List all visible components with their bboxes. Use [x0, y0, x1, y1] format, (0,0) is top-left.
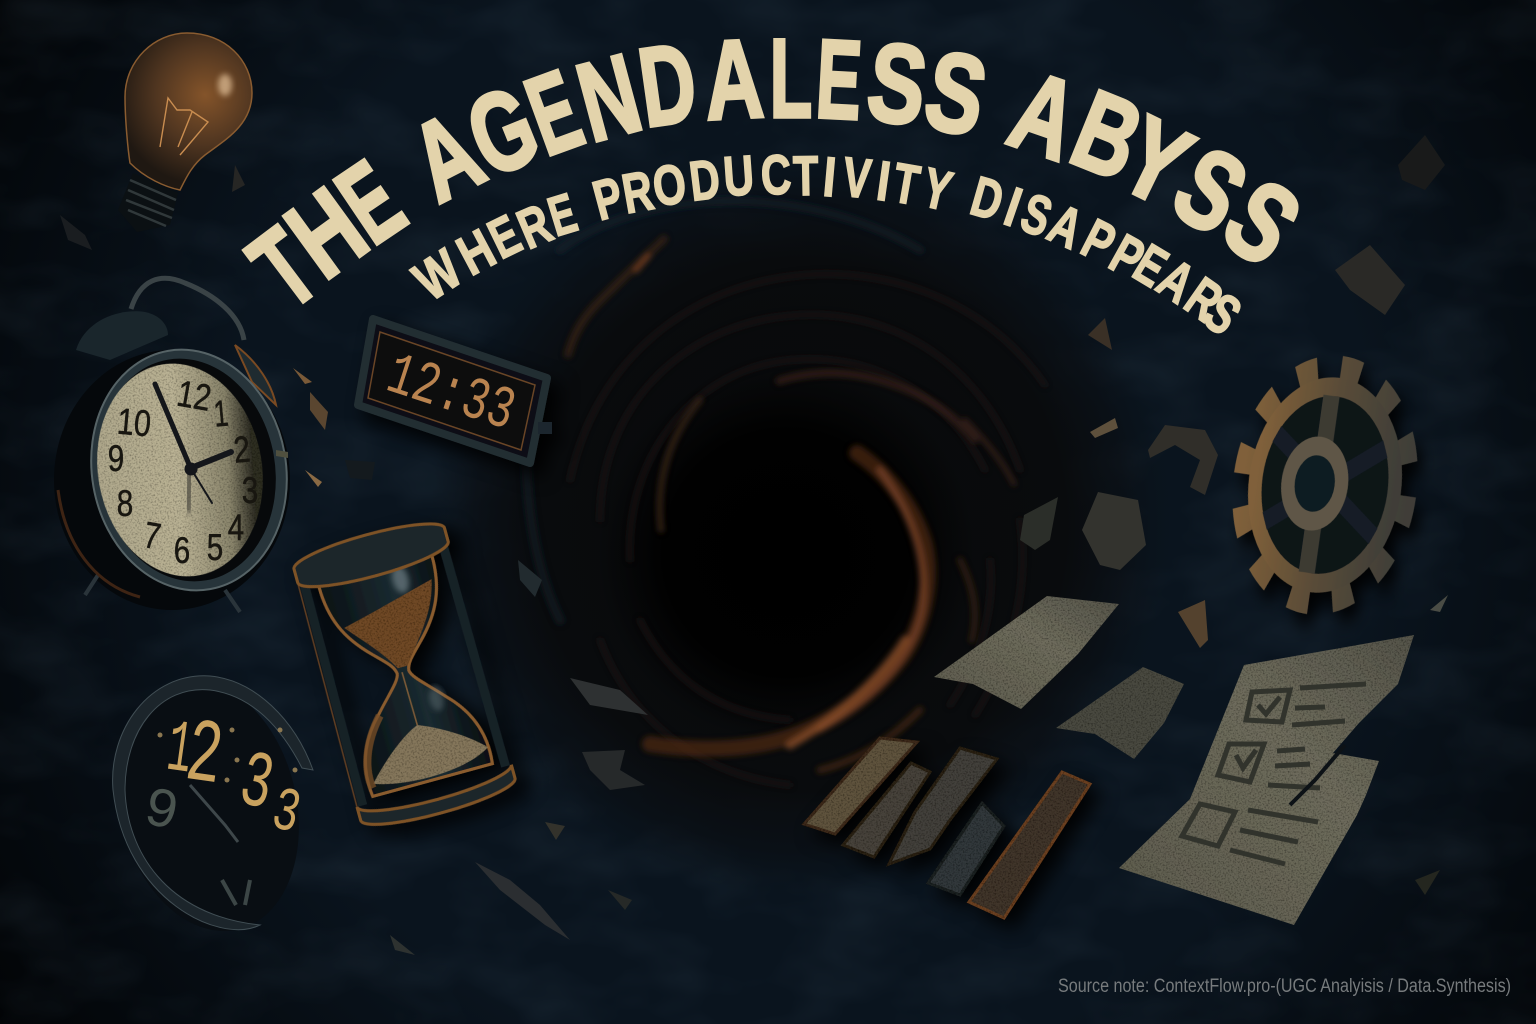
subtitle: I — [997, 175, 1029, 239]
title: E — [316, 137, 425, 267]
icon: digital clock — [358, 319, 552, 463]
title: S — [915, 27, 997, 161]
title: G — [451, 62, 554, 201]
gear teeth — [1227, 357, 1423, 613]
subtitle: E — [1123, 233, 1178, 300]
icon: broken clock — [92, 660, 324, 950]
subtitle: H — [447, 217, 505, 287]
title: S — [860, 19, 934, 150]
title: Y — [1102, 93, 1209, 231]
flying debris — [60, 135, 1448, 955]
digital time: 12:33 — [378, 342, 523, 447]
title: S — [1201, 156, 1322, 290]
upper sand — [338, 579, 452, 679]
icon: light bulb — [118, 33, 252, 232]
clock numbers: 7 — [140, 515, 164, 558]
clock numbers: 8 — [117, 484, 133, 525]
subtitle: O — [649, 152, 690, 219]
clock numbers: 5 — [207, 528, 223, 569]
plank two — [843, 763, 930, 857]
gear spokes — [1307, 396, 1332, 573]
check lines — [1230, 684, 1366, 864]
subtitle: U — [721, 144, 756, 208]
fragmented digits: 3 — [232, 738, 281, 833]
fragmented digits: 9 — [138, 777, 184, 846]
subtitle: S — [1013, 182, 1060, 249]
subtitle: Y — [917, 156, 958, 223]
fragmented digits — [138, 704, 307, 851]
title: S — [1153, 123, 1267, 259]
subtitle: A — [1147, 247, 1206, 316]
subtitle — [403, 143, 1252, 347]
icon: alarm clock — [54, 278, 306, 612]
clock numbers: 2 — [232, 429, 252, 472]
clock numbers: 3 — [242, 471, 258, 512]
subtitle: V — [840, 146, 874, 211]
subtitle: R — [1174, 266, 1233, 334]
title: A — [392, 88, 501, 226]
clock numbers — [108, 373, 258, 572]
title: H — [265, 165, 388, 302]
clock numbers: 12 — [174, 373, 214, 420]
check boxes — [1182, 690, 1290, 846]
lower sand — [362, 709, 491, 792]
clock hands — [155, 384, 231, 510]
rust arms — [526, 201, 1014, 770]
title: B — [1056, 66, 1159, 204]
subtitle: P — [1072, 207, 1125, 275]
title: A — [702, 16, 766, 144]
clock numbers: 1 — [212, 392, 230, 435]
icon: hourglass — [288, 514, 519, 834]
subtitle: P — [1100, 223, 1154, 291]
subtitle: A — [1039, 192, 1092, 262]
title: L — [770, 16, 812, 141]
subtitle: E — [479, 204, 531, 271]
bulb glass — [125, 33, 252, 190]
plank one — [804, 738, 917, 834]
title: T — [229, 205, 340, 332]
subtitle: T — [792, 145, 819, 208]
clock numbers: 6 — [174, 531, 190, 572]
fragmented digits: 3 — [265, 776, 307, 851]
paper fragment one — [934, 596, 1119, 709]
subtitle: C — [759, 143, 793, 207]
caps — [288, 514, 519, 834]
subtitle: P — [587, 165, 630, 233]
bulb screw base — [118, 173, 178, 232]
clock numbers: 4 — [228, 508, 244, 549]
subtitle: D — [964, 165, 1010, 233]
clock numbers: 10 — [115, 401, 153, 445]
icon: gear — [1227, 357, 1423, 613]
subtitle: I — [821, 145, 839, 209]
gear hub — [1283, 442, 1346, 525]
subtitle: I — [873, 149, 894, 213]
bulb filament — [160, 98, 208, 155]
broken planks — [804, 738, 1090, 918]
broken clock body — [92, 660, 324, 950]
fragmented digits: 1 — [162, 707, 198, 794]
title: A — [996, 47, 1093, 184]
subtitle: D — [686, 148, 723, 213]
clock bezel — [72, 334, 306, 606]
title: N — [566, 30, 653, 166]
fragmented digits: 2 — [180, 704, 229, 809]
title: E — [511, 46, 596, 179]
subtitle: R — [618, 159, 658, 226]
clock bells and handle — [54, 278, 290, 612]
clock numbers: 9 — [108, 439, 124, 480]
plank three — [889, 748, 997, 864]
subtitle: W — [403, 237, 472, 313]
frame rods — [300, 539, 506, 805]
subtitle: S — [1193, 282, 1252, 347]
clock face — [81, 350, 279, 590]
title: D — [632, 20, 704, 151]
plank five — [969, 772, 1090, 918]
gear ring — [1242, 378, 1408, 592]
subtitle: E — [541, 182, 584, 249]
vortex — [430, 155, 1170, 895]
title: E — [813, 15, 865, 143]
faint bands — [570, 274, 1045, 785]
subtitle: R — [509, 192, 561, 261]
title — [229, 15, 1322, 332]
plank four — [928, 803, 1004, 895]
glass — [311, 542, 493, 797]
paper fragment two — [1056, 667, 1184, 759]
subtitle: T — [888, 152, 924, 218]
checklist paper — [1119, 635, 1414, 925]
